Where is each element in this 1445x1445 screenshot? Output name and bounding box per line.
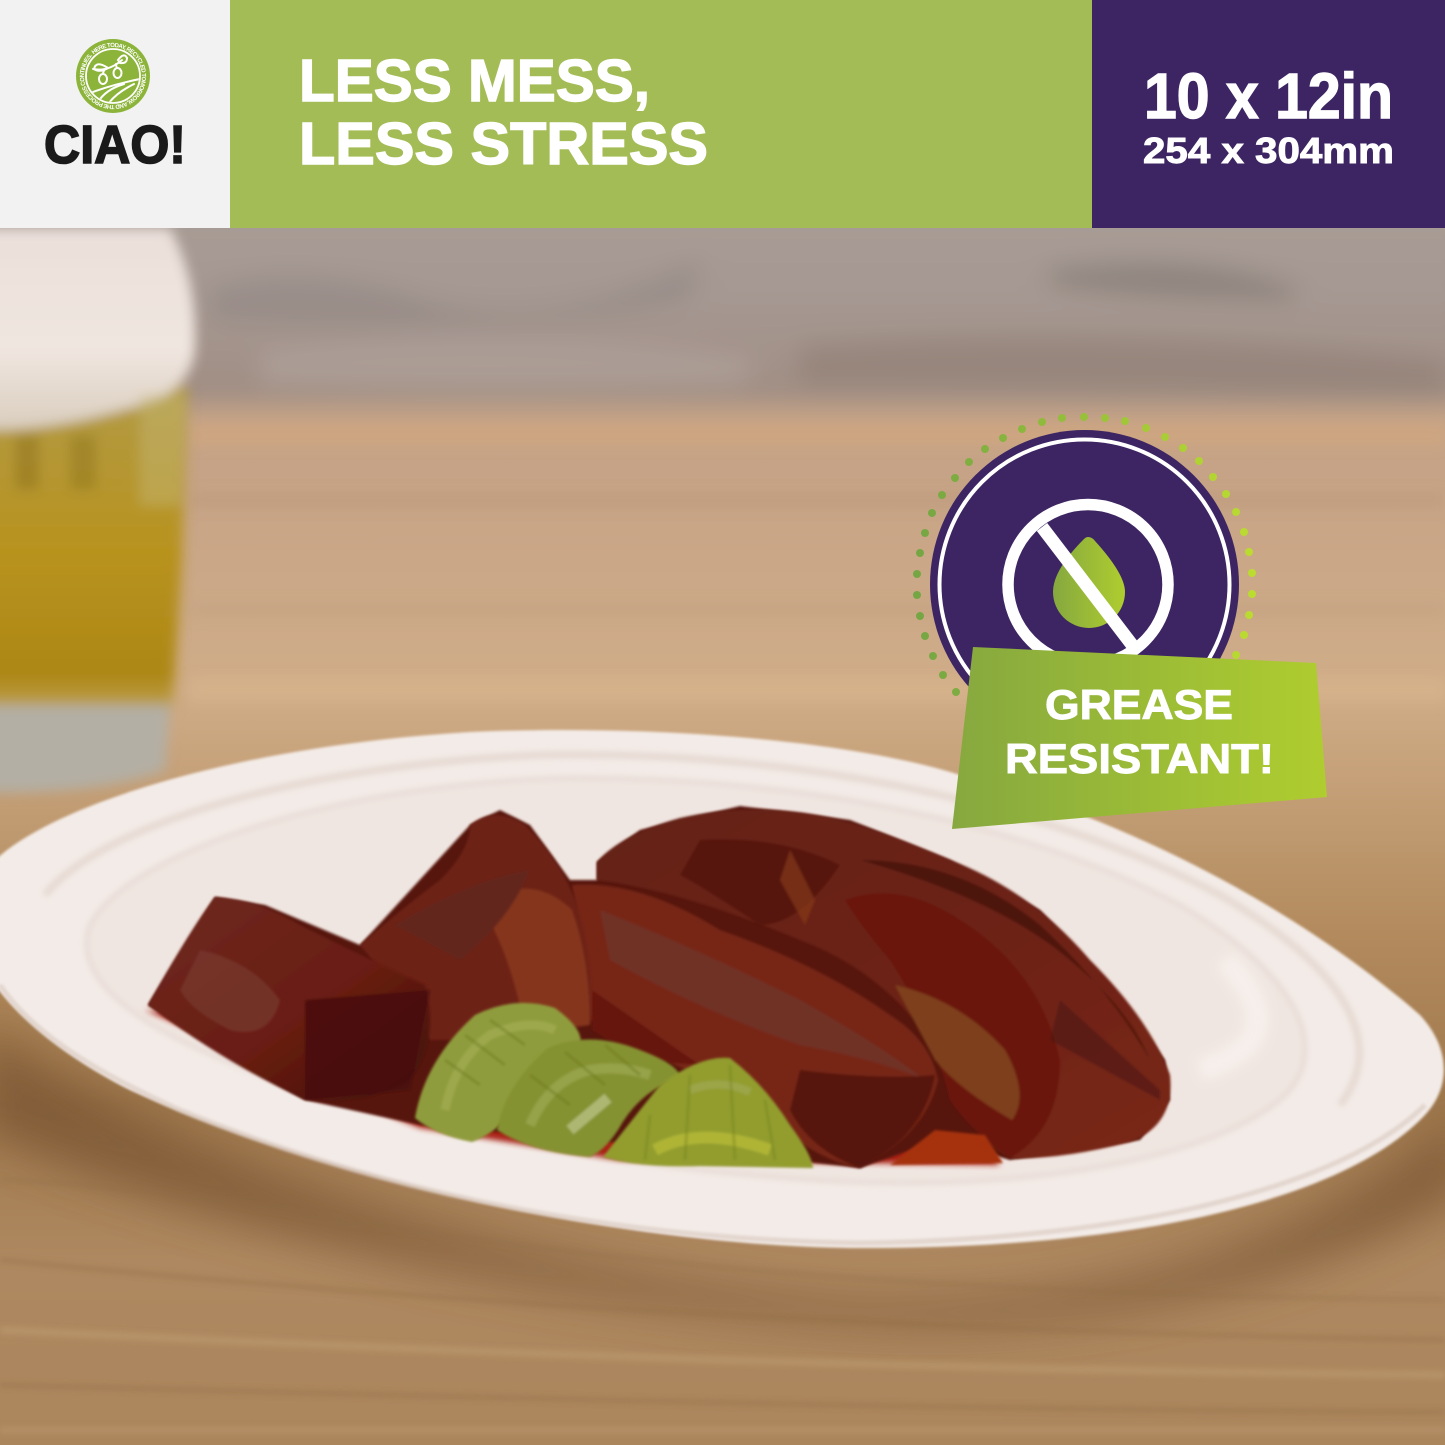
wood grain streaks <box>190 435 1445 690</box>
icon: prohibition sign <box>1008 504 1168 664</box>
purple disc <box>930 430 1239 739</box>
header band <box>0 0 1445 228</box>
banner text <box>1005 681 1274 782</box>
headline <box>299 48 708 177</box>
rib middle left <box>360 815 591 1040</box>
pickle 2 <box>497 1039 680 1157</box>
banner text: RESISTANT! <box>1005 735 1274 782</box>
dotted ring <box>913 413 1256 696</box>
rib left <box>148 897 430 1101</box>
banner <box>952 647 1327 829</box>
rib back right <box>597 809 1170 1158</box>
meat base silhouette <box>148 806 1170 1168</box>
table shadow and grain <box>0 1020 1445 1430</box>
icon: grease drop <box>1053 537 1125 628</box>
rib center <box>572 885 938 1168</box>
banner text: GREASE <box>1045 681 1233 728</box>
headline: LESS STRESS <box>299 111 708 177</box>
plate <box>0 730 1444 1248</box>
headline: LESS MESS, <box>299 48 650 114</box>
plate rim edge shading <box>0 985 1425 1243</box>
food: ribs and pickles <box>145 806 1170 1168</box>
blurred stone wall <box>0 200 1445 405</box>
beer glass <box>0 228 195 792</box>
plate body <box>0 730 1444 1248</box>
burnt end <box>890 1130 1003 1165</box>
wood table <box>0 396 1445 1212</box>
sauce pool <box>145 1010 1000 1165</box>
pickle 3 <box>603 1058 813 1168</box>
logo panel <box>0 0 230 228</box>
badge: grease resistant <box>913 413 1327 829</box>
wordmark: CIAO! <box>44 115 186 175</box>
plate inner well <box>87 778 1305 1183</box>
headline panel <box>230 0 1092 228</box>
size panel <box>1092 0 1445 228</box>
pickle 1 <box>415 1003 581 1142</box>
dimensions: 254 x 304mm <box>1143 130 1394 171</box>
dimensions <box>1143 60 1394 171</box>
icon: olive branch emblem: HERE TODAY, RECYCLED TOMORROW, AND THE PROCESS CONTINUES. <box>80 42 146 110</box>
white ring <box>940 440 1230 730</box>
dimensions: 10 x 12in <box>1144 60 1393 132</box>
